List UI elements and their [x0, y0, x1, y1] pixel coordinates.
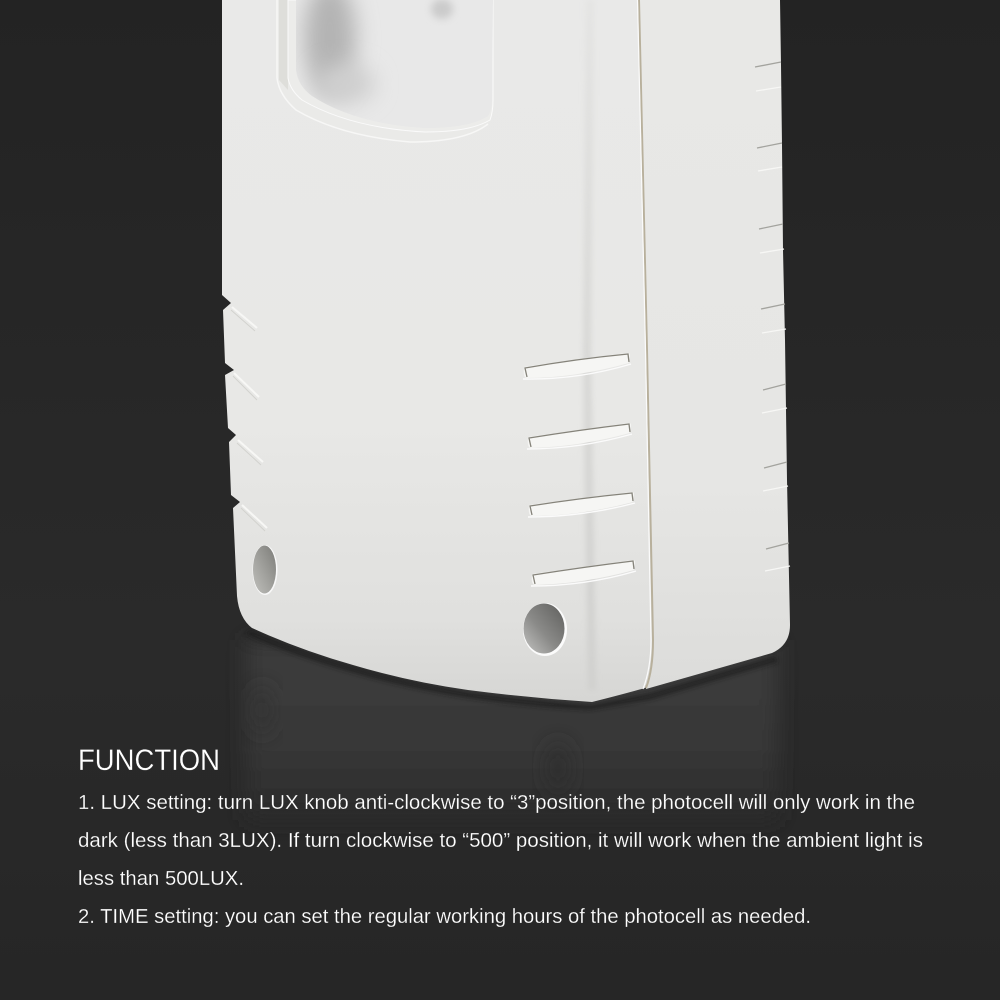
heading: FUNCTION: [78, 744, 220, 777]
sensor window: [277, 0, 494, 142]
side plate of housing: [638, 0, 790, 689]
side plate edge ticks: [755, 62, 790, 571]
instruction line 4: 2. TIME setting: you can set the regular working hours of the photocell as needed.: [78, 906, 811, 928]
infographic canvas: [78, 0, 922, 927]
right screw hole: [523, 603, 567, 656]
product: photocell sensor housing: [222, 0, 790, 702]
text block: function: [78, 744, 923, 928]
front face of housing: [222, 0, 653, 702]
housing seam: [639, 0, 653, 688]
floor reflection of product: [246, 640, 778, 820]
slot 2: [527, 423, 632, 449]
instruction line 1: 1. LUX setting: turn LUX knob anti-clockwise to “3”position, the photocell will only work in the: [78, 792, 915, 814]
slot 4: [531, 560, 636, 586]
slot 3: [528, 492, 635, 517]
instruction line 3: less than 500LUX.: [78, 868, 244, 890]
ventilation slots: [523, 353, 636, 586]
corner strip shading: [587, 0, 592, 690]
slot 1: [523, 353, 631, 379]
instruction line 2: dark (less than 3LUX). If turn clockwise to “500” position, it will work when the ambient light is: [78, 830, 923, 852]
contact shadow: [245, 630, 778, 710]
left screw hole: [252, 545, 278, 595]
left side ridges: [232, 307, 267, 528]
